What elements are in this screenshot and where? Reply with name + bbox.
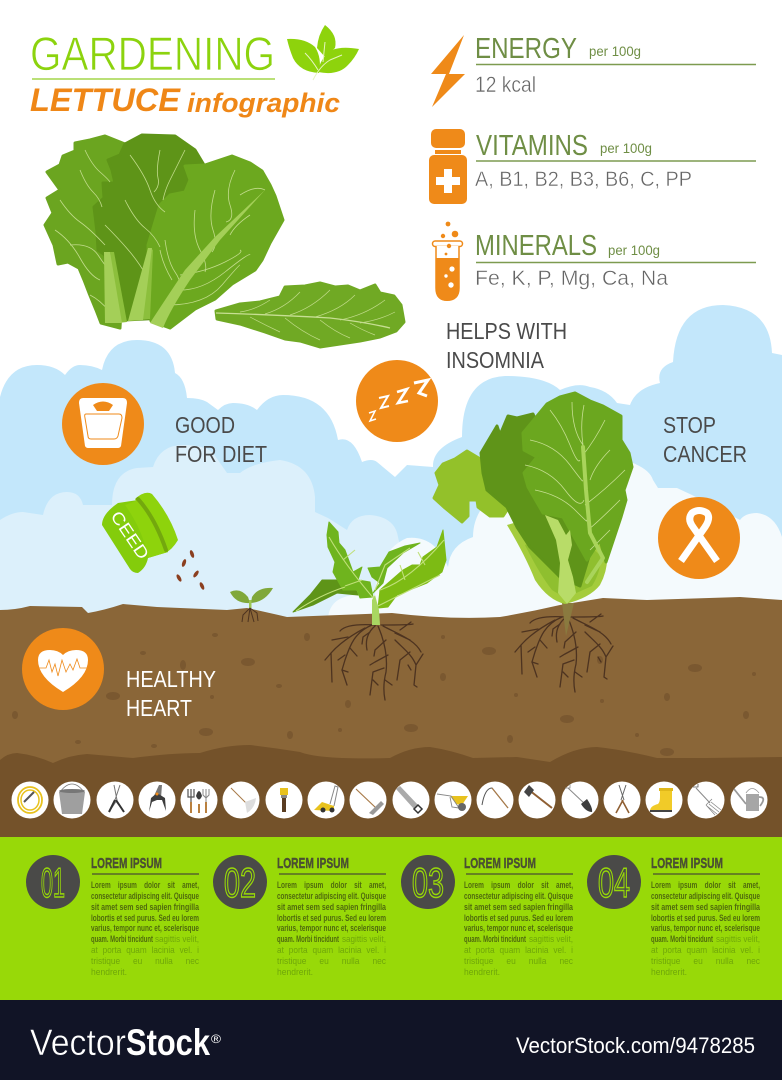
back leaf bbox=[45, 136, 128, 328]
body copy: quam. Morbi tincidunt bbox=[91, 934, 154, 945]
dark leaf bbox=[293, 580, 358, 612]
number badge: 04 bbox=[598, 859, 630, 906]
small lettuce leaf bbox=[216, 283, 404, 347]
body copy: hendrerit. bbox=[464, 967, 500, 978]
column heading: LOREM IPSUM bbox=[91, 855, 162, 872]
bag text: CEED bbox=[107, 508, 153, 563]
body copy: at porta quam lacinia vel. i bbox=[277, 945, 386, 956]
body copy: quam. Morbi tincidunt bbox=[651, 934, 714, 945]
body copy: hendrerit. bbox=[277, 967, 313, 978]
tool: rake bbox=[222, 782, 260, 818]
body copy: at porta quam lacinia vel. i bbox=[91, 945, 199, 956]
icon: test tube bbox=[432, 222, 462, 301]
energy block: per 100g bbox=[589, 43, 641, 59]
body copy: tristique eu nulla nec bbox=[91, 956, 199, 967]
number badge: 03 bbox=[412, 859, 444, 906]
body copy: tristique eu nulla nec bbox=[651, 956, 760, 967]
tool: hedge shears bbox=[604, 782, 640, 818]
body copy: tristique eu nulla nec bbox=[464, 956, 573, 967]
minerals block: Fe, K, P, Mg, Ca, Na bbox=[475, 267, 668, 290]
body copy: hendrerit. bbox=[651, 967, 687, 978]
body copy: quam. Morbi tincidunt bbox=[277, 934, 340, 945]
label: healthy heart: HEALTHY bbox=[126, 666, 216, 692]
tool: bucket bbox=[54, 782, 90, 818]
heading: lettuce: LETTUCE bbox=[30, 82, 182, 118]
body copy bbox=[464, 880, 574, 978]
sprout bbox=[230, 588, 273, 622]
icon: scale bbox=[62, 383, 144, 465]
tool: fork bbox=[688, 782, 724, 818]
tool: hoe rake bbox=[350, 782, 386, 818]
tool: pruner bbox=[138, 782, 176, 818]
label: healthy heart bbox=[126, 666, 216, 721]
minerals block bbox=[475, 230, 756, 290]
roots bbox=[325, 622, 423, 700]
heading: infographic: infographic bbox=[187, 88, 340, 118]
body copy: sagittis velit, bbox=[529, 934, 573, 945]
body copy: consectetur adipiscing elit. Quisque bbox=[464, 891, 573, 902]
body copy: tristique eu nulla nec bbox=[277, 956, 386, 967]
big lettuce plant bbox=[434, 393, 632, 636]
number badge bbox=[213, 855, 267, 909]
footer bar bbox=[0, 1000, 782, 1080]
body copy: sit amet sem sed sapien fringilla bbox=[464, 902, 574, 913]
body copy: lobortis et sed purus. Sed eu lorem bbox=[91, 913, 199, 924]
column heading: LOREM IPSUM bbox=[464, 855, 536, 872]
number badge bbox=[401, 855, 455, 909]
front leaf bbox=[148, 156, 283, 328]
sky clouds bbox=[0, 305, 782, 640]
icon: lightning bolt bbox=[431, 35, 465, 107]
body copy: consectetur adipiscing elit. Quisque bbox=[91, 891, 199, 902]
veins bbox=[525, 402, 625, 550]
tool: boot bbox=[646, 782, 682, 818]
icon: heart bbox=[22, 628, 104, 710]
title bbox=[30, 27, 340, 118]
body copy: sit amet sem sed sapien fringilla bbox=[277, 902, 387, 913]
tool: shovel bbox=[562, 782, 598, 818]
footer logo bbox=[30, 1022, 221, 1063]
body copy: at porta quam lacinia vel. i bbox=[464, 945, 573, 956]
soil ground bbox=[0, 597, 782, 837]
body copy: varius, tempor nunc et, scelerisque bbox=[277, 923, 386, 934]
label: stop cancer bbox=[663, 412, 747, 467]
body copy: hendrerit. bbox=[91, 967, 127, 978]
body copy: lobortis et sed purus. Sed eu lorem bbox=[277, 913, 386, 924]
body copy: varius, tempor nunc et, scelerisque bbox=[464, 923, 573, 934]
number badge: 02 bbox=[224, 859, 256, 906]
seed bag bbox=[102, 493, 178, 573]
footer logo: ® bbox=[211, 1032, 221, 1046]
body copy: sagittis velit, bbox=[155, 934, 199, 945]
stems bbox=[545, 515, 576, 604]
label: stop cancer: STOP bbox=[663, 412, 716, 438]
right leaf bbox=[378, 530, 446, 608]
label: stop cancer: CANCER bbox=[663, 441, 747, 467]
middle leaf bbox=[94, 135, 204, 320]
body copy bbox=[651, 880, 761, 978]
icon: sleep bbox=[356, 360, 438, 442]
body copy: quam. Morbi tincidunt bbox=[464, 934, 527, 945]
column heading: LOREM IPSUM bbox=[277, 855, 349, 872]
number badge: 01 bbox=[41, 859, 65, 906]
body copy: sit amet sem sed sapien fringilla bbox=[91, 902, 200, 913]
tool: wheelbarrow bbox=[434, 782, 472, 818]
body copy: at porta quam lacinia vel. i bbox=[651, 945, 760, 956]
minerals block: per 100g bbox=[608, 242, 660, 258]
body copy: sagittis velit, bbox=[342, 934, 386, 945]
body copy: sagittis velit, bbox=[716, 934, 760, 945]
vitamins block bbox=[475, 130, 756, 191]
vitamins block: A, B1, B2, B3, B6, C, PP bbox=[475, 168, 692, 191]
big lettuce bbox=[45, 135, 283, 328]
green panel bbox=[0, 837, 782, 1000]
body copy: Lorem ipsum dolor sit amet, bbox=[277, 880, 386, 891]
veins bbox=[55, 150, 265, 312]
body copy: varius, tempor nunc et, scelerisque bbox=[91, 923, 199, 934]
lower head bbox=[507, 515, 607, 604]
tool: watering can bbox=[730, 782, 768, 818]
tool: saw bbox=[392, 782, 430, 818]
number badge bbox=[587, 855, 641, 909]
big plant roots bbox=[515, 614, 613, 692]
label: helps with insomnia bbox=[446, 318, 567, 373]
light back leaf bbox=[434, 451, 509, 522]
body copy: Lorem ipsum dolor sit amet, bbox=[91, 880, 199, 891]
mid plant bbox=[293, 522, 446, 700]
label: good for diet bbox=[175, 412, 267, 467]
body copy: consectetur adipiscing elit. Quisque bbox=[277, 891, 386, 902]
column heading: LOREM IPSUM bbox=[651, 855, 723, 872]
vitamins block: per 100g bbox=[600, 140, 652, 156]
tool: mower bbox=[308, 782, 344, 818]
vitamins block: VITAMINS bbox=[476, 130, 588, 162]
tools row bbox=[12, 782, 768, 818]
column 04 bbox=[587, 855, 761, 978]
footer url: VectorStock.com/9478285 bbox=[516, 1033, 755, 1058]
energy block: 12 kcal bbox=[475, 72, 536, 97]
energy block: ENERGY bbox=[475, 33, 577, 65]
front leaf bbox=[523, 393, 632, 562]
footer logo: Vector bbox=[30, 1022, 126, 1063]
tall leaf bbox=[327, 522, 373, 598]
dark back leaf bbox=[481, 414, 590, 586]
energy block bbox=[475, 33, 756, 97]
tool: hand tools bbox=[180, 782, 218, 818]
tool: scythe bbox=[476, 782, 514, 818]
tool: hose bbox=[12, 782, 48, 818]
root cone bbox=[562, 603, 574, 636]
body copy: lobortis et sed purus. Sed eu lorem bbox=[464, 913, 573, 924]
body copy bbox=[277, 880, 387, 978]
icon: ribbon bbox=[658, 497, 740, 579]
middle leaf bbox=[368, 543, 420, 593]
heading: gardening: GARDENING bbox=[30, 27, 275, 80]
body copy: Lorem ipsum dolor sit amet, bbox=[464, 880, 573, 891]
label: helps with insomnia: HELPS WITH bbox=[446, 318, 567, 344]
stems bbox=[110, 252, 127, 323]
footer logo: Stock bbox=[126, 1022, 210, 1063]
icon: vitamin bottle bbox=[429, 129, 467, 204]
tool: axe bbox=[518, 782, 556, 818]
column 03 bbox=[401, 855, 574, 978]
minerals block: MINERALS bbox=[475, 230, 597, 262]
label: helps with insomnia: INSOMNIA bbox=[446, 347, 545, 373]
number badge bbox=[26, 855, 80, 909]
veins bbox=[296, 537, 444, 611]
label: good for diet: GOOD bbox=[175, 412, 235, 438]
seeds bbox=[175, 550, 205, 590]
column 02 bbox=[213, 855, 387, 978]
column 01 bbox=[26, 855, 200, 978]
body copy bbox=[91, 880, 200, 978]
label: good for diet: FOR DIET bbox=[175, 441, 267, 467]
tool: shears bbox=[96, 782, 134, 818]
stem bbox=[372, 595, 380, 625]
icon: leaves logo bbox=[287, 25, 359, 80]
tool: brush bbox=[266, 782, 302, 818]
label: healthy heart: HEART bbox=[126, 695, 192, 721]
